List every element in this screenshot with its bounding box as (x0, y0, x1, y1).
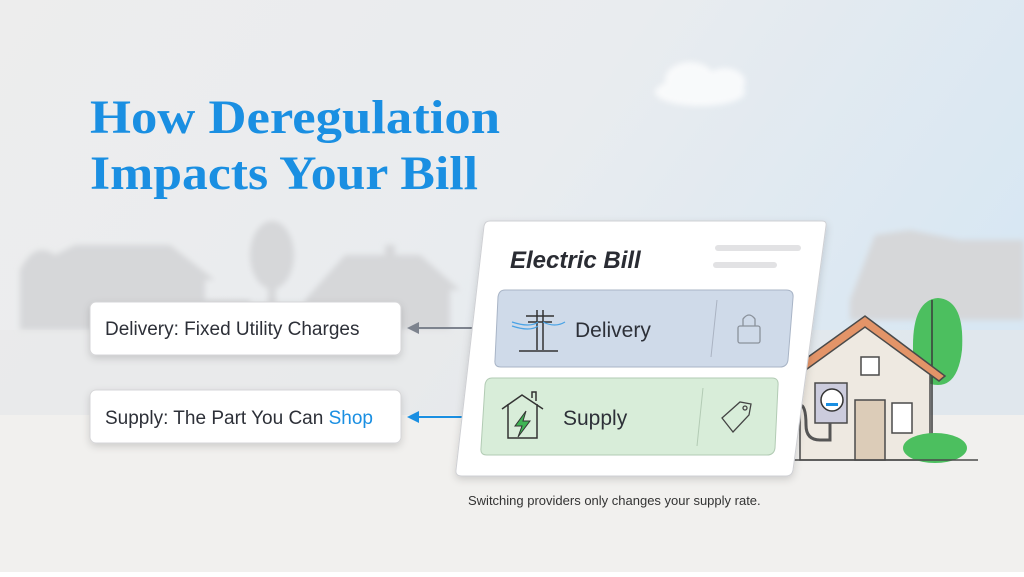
row: supply (481, 378, 778, 455)
callout: supply: Supply: The Part You Can Shop (105, 408, 373, 429)
callout: supply (90, 390, 401, 443)
arrow: supply (407, 411, 488, 423)
title (90, 91, 500, 200)
arrow: delivery (407, 322, 500, 334)
caption: Switching providers only changes your supply rate. (468, 493, 761, 508)
callout: delivery: Delivery: Fixed Utility Charges (105, 319, 359, 340)
row: supply: Supply (563, 407, 628, 430)
house (780, 298, 978, 463)
row: delivery: Delivery (575, 319, 651, 342)
title: How Deregulation (90, 91, 500, 144)
callout: delivery (90, 302, 401, 355)
heading: electric bill: Electric Bill (510, 247, 642, 274)
row: delivery (495, 290, 793, 367)
title: Impacts Your Bill (90, 147, 478, 200)
bill card (456, 221, 826, 476)
